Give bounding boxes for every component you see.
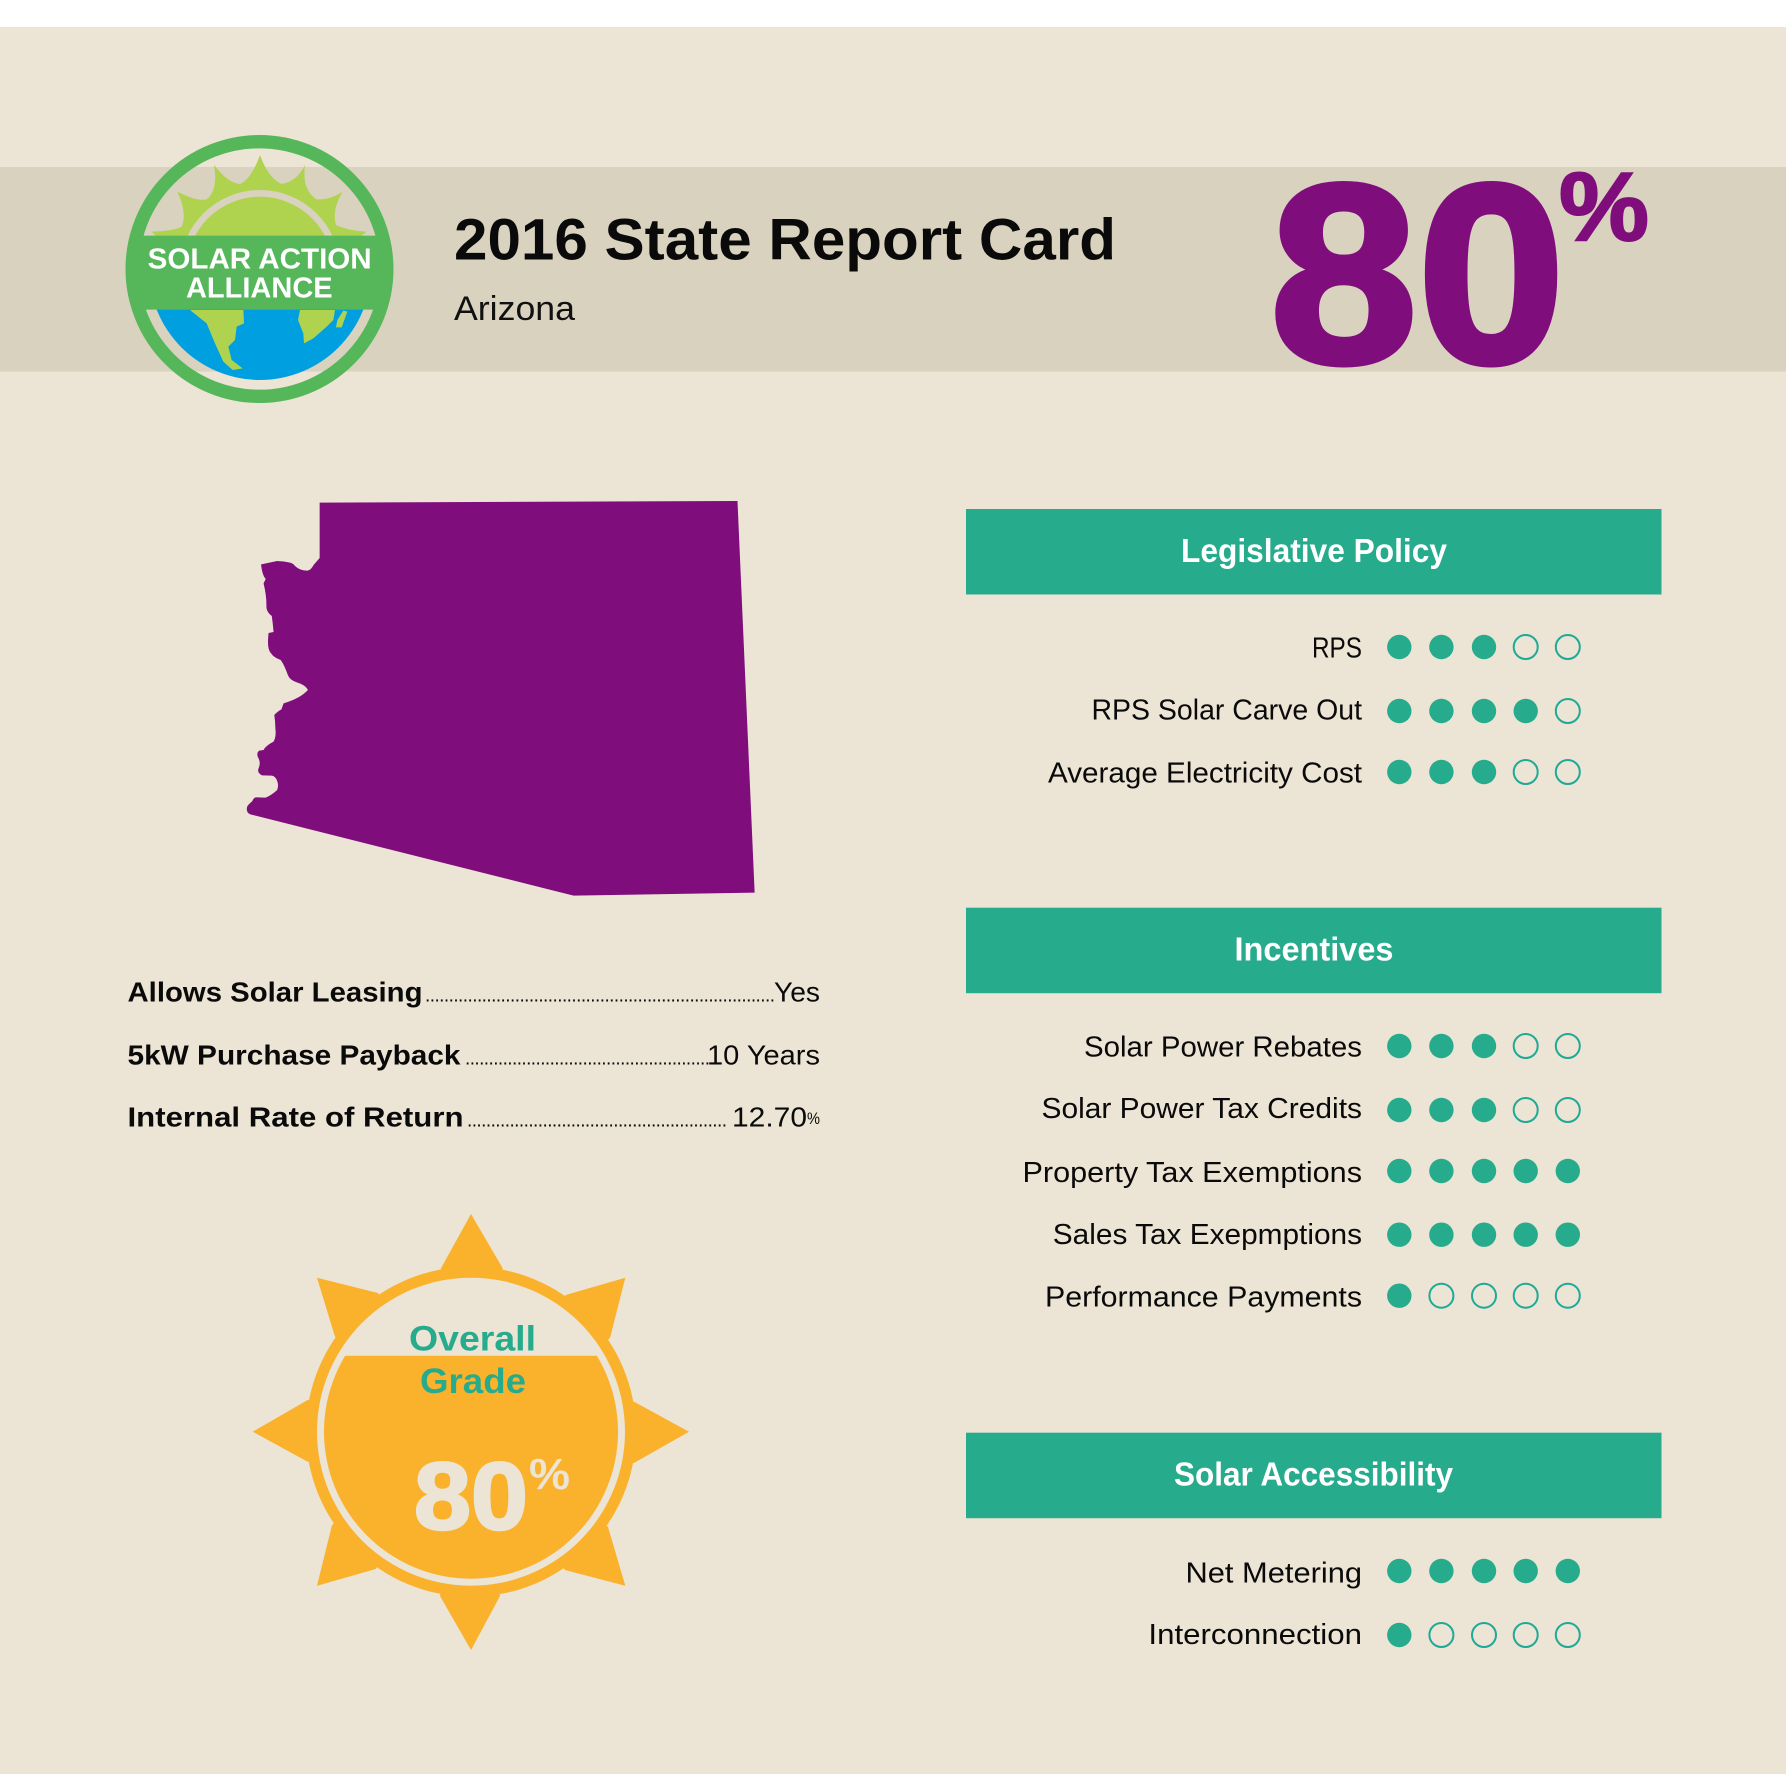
title: 2016 State Report Card — [454, 207, 1116, 272]
subtitle: state name: Arizona — [454, 290, 575, 328]
heading — [966, 908, 1662, 993]
row: Solar Power Tax Credits: Solar Power Tax Credits — [1042, 1093, 1362, 1125]
logo text: ALLIANCE — [186, 273, 333, 305]
stat: payback — [128, 1039, 820, 1070]
row: Net Metering — [1186, 1557, 1580, 1589]
heading — [966, 1433, 1662, 1518]
panel: solar accessibility — [966, 1433, 1662, 1651]
map: Arizona — [247, 501, 755, 896]
row: Solar Power Rebates — [1084, 1032, 1580, 1064]
panel: legislative policy — [966, 509, 1662, 790]
badge label — [409, 1319, 536, 1401]
badge score: % — [529, 1450, 570, 1499]
stat: rate of return: ....................................................... — [467, 1111, 727, 1132]
row: Sales Tax Exepmptions: Sales Tax Exepmptions — [1053, 1219, 1362, 1251]
heading text: Legislative Policy — [1181, 532, 1448, 569]
row: RPS — [1312, 633, 1580, 665]
stat: solar leasing: .......................................................................... — [425, 986, 775, 1007]
row: Interconnection: Interconnection — [1148, 1619, 1362, 1651]
row: RPS: RPS — [1312, 633, 1362, 665]
stat: rate of return — [128, 1102, 820, 1133]
badge label: Overall — [409, 1319, 536, 1358]
badge score — [414, 1443, 570, 1550]
row: Average Electricity Cost: Average Electricity Cost — [1048, 758, 1362, 790]
row: Interconnection — [1148, 1619, 1580, 1651]
stat: payback: 10 Years — [707, 1039, 820, 1070]
sun rays — [253, 1214, 689, 1650]
row: Average Electricity Cost — [1048, 758, 1580, 790]
badge: overall grade sun — [253, 1214, 689, 1650]
heading — [966, 509, 1662, 594]
stat: solar leasing — [128, 977, 820, 1008]
row: RPS Solar Carve Out — [1092, 694, 1580, 726]
logo text — [148, 243, 372, 305]
stat: rate of return: Internal Rate of Return — [128, 1102, 464, 1133]
big score: % — [1559, 152, 1649, 261]
row: Solar Power Rebates: Solar Power Rebates — [1084, 1032, 1362, 1064]
stat: rate of return: % — [807, 1109, 820, 1128]
icon: sun — [152, 155, 366, 236]
stat: rate of return: 12.70 — [732, 1102, 807, 1133]
row: Performance Payments — [1045, 1282, 1580, 1314]
badge score: 80 — [414, 1443, 528, 1550]
logo: Solar Action Alliance — [132, 142, 387, 396]
header band — [0, 167, 1786, 372]
logo banner — [133, 236, 385, 310]
row: Property Tax Exemptions: Property Tax Exemptions — [1022, 1157, 1362, 1189]
stat: payback: .................................................... — [465, 1048, 710, 1069]
row: RPS Solar Carve Out: RPS Solar Carve Out — [1092, 694, 1362, 726]
row: Performance Payments: Performance Payments — [1045, 1282, 1362, 1314]
row: Net Metering: Net Metering — [1186, 1557, 1362, 1589]
row: Sales Tax Exepmptions — [1053, 1219, 1580, 1251]
row: Property Tax Exemptions — [1022, 1157, 1580, 1189]
big score: 80 — [1270, 132, 1565, 417]
panel: incentives — [966, 908, 1662, 1314]
logo text: SOLAR ACTION — [148, 243, 372, 275]
badge label: Grade — [420, 1362, 526, 1401]
stat: payback: 5kW Purchase Payback — [128, 1039, 461, 1070]
heading text: Solar Accessibility — [1174, 1456, 1454, 1493]
stat: solar leasing: Yes — [774, 977, 820, 1008]
stat: solar leasing: Allows Solar Leasing — [128, 977, 422, 1008]
stats list — [128, 977, 820, 1133]
icon: globe — [156, 310, 364, 380]
logo ring — [132, 142, 387, 396]
row: Solar Power Tax Credits — [1042, 1093, 1580, 1125]
heading text: Incentives — [1234, 931, 1394, 968]
